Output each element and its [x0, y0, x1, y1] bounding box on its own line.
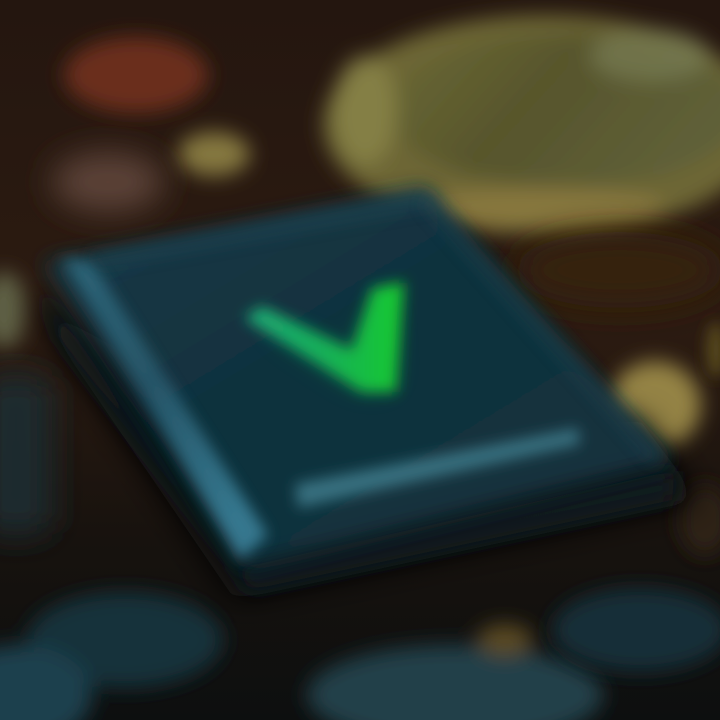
check glow — [250, 295, 390, 385]
coin: bottom center teal coin — [307, 624, 603, 720]
box right edge highlight — [420, 192, 668, 462]
coin: bottom left teal coins — [0, 592, 223, 720]
coin: pinkish coin — [52, 152, 164, 212]
panel: teal box with check mark — [40, 188, 676, 590]
coin: right edge gold — [706, 322, 720, 378]
coin: red copper coin top left — [64, 37, 208, 113]
stack: left dark slate coins — [0, 375, 52, 535]
coin: gold coin right of box — [609, 361, 701, 449]
label bar — [295, 428, 580, 508]
box top — [44, 188, 672, 568]
coin: dark bronze shadow beneath gold coin — [515, 232, 720, 308]
coin: small pale gold coin — [178, 132, 250, 176]
box left lit edge — [62, 258, 268, 560]
box shadow — [30, 300, 700, 600]
box top edge highlight — [90, 190, 440, 268]
box side — [40, 285, 676, 590]
icon: green check mark — [244, 282, 404, 392]
coin: lower right brown — [679, 484, 720, 556]
coin: bottom right teal coin — [552, 588, 720, 672]
coin: large gold coin top right — [323, 15, 720, 235]
coin: left edge pale coin — [0, 272, 26, 348]
